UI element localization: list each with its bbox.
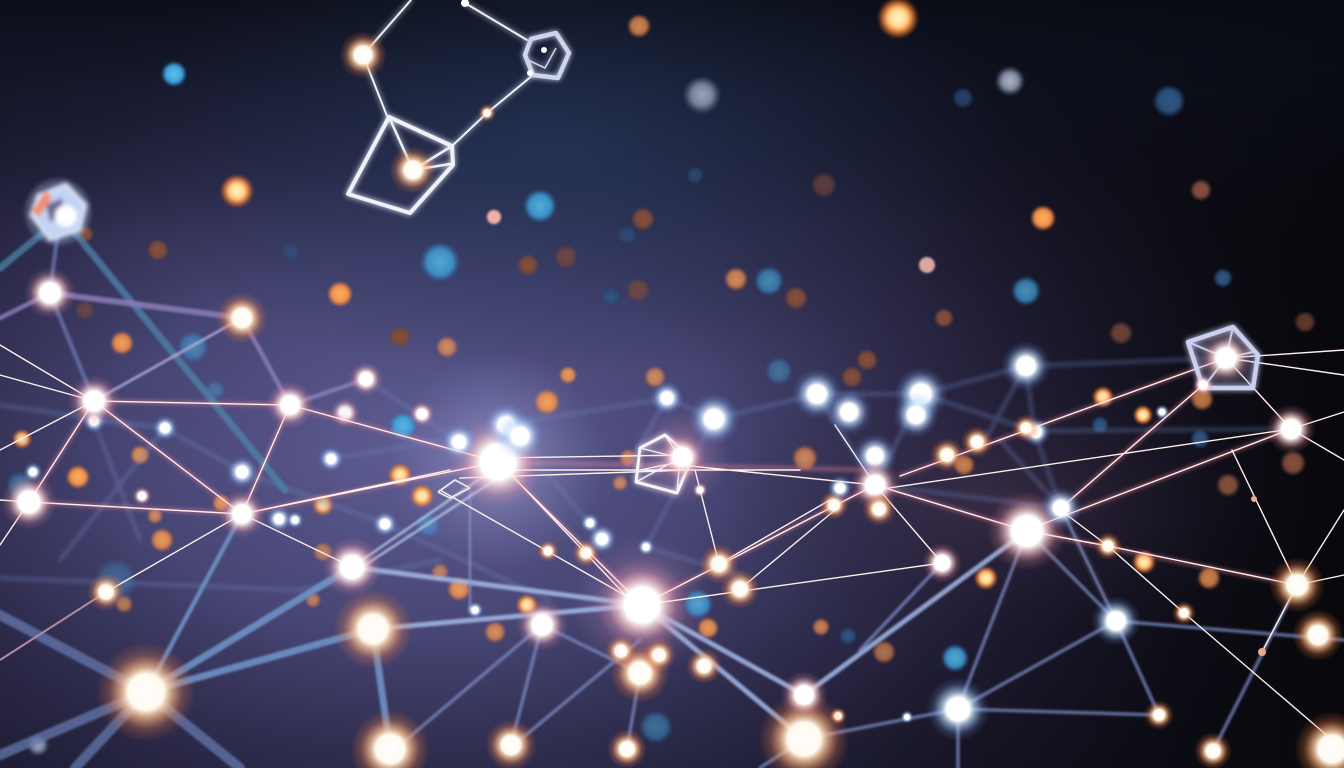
glowing nodes: centre cluster	[441, 367, 948, 768]
wireframe polyhedron: centre	[636, 435, 692, 493]
thin bright connections: glow	[29, 358, 1297, 605]
wireframe polyhedron: top centre	[525, 33, 569, 78]
thick blue connections	[0, 212, 1344, 768]
thin bright connections	[0, 345, 1344, 750]
soft background connections	[0, 358, 1291, 621]
glowing nodes: right cluster	[819, 332, 1344, 768]
glowing nodes: left cluster	[1, 31, 537, 768]
wireframe polyhedron: top left	[348, 0, 533, 213]
blurred polyhedron: left	[25, 179, 91, 245]
wireframe polyhedron: small centre left	[438, 480, 470, 498]
wireframe polyhedron: right	[1188, 327, 1258, 388]
